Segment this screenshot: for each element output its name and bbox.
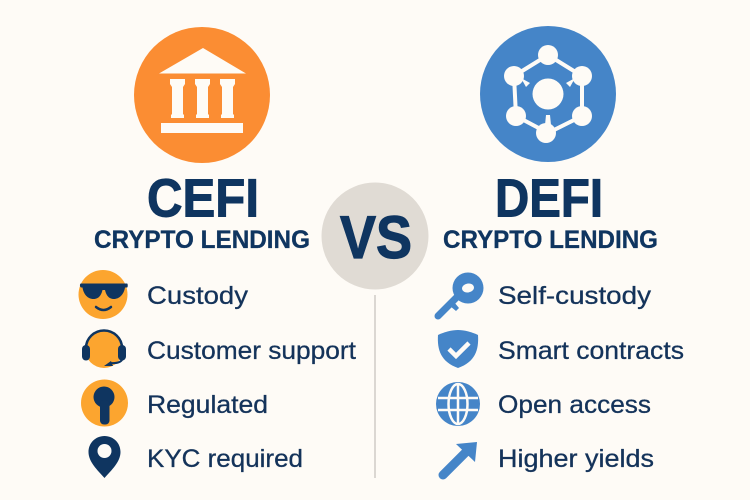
icon: location pin bbox=[88, 436, 120, 478]
label: regulated: Regulated bbox=[147, 391, 268, 419]
label: open access: Open access bbox=[498, 391, 651, 419]
subheading: DeFi crypto lending: CRYPTO LENDING bbox=[443, 226, 658, 254]
label: self-custody: Self-custody bbox=[498, 282, 652, 310]
subheading: CeFi crypto lending: CRYPTO LENDING bbox=[94, 226, 310, 254]
icon: CeFi bank bbox=[134, 27, 270, 163]
icon: sunglasses face bbox=[78, 270, 128, 319]
icon: DeFi network bbox=[480, 26, 616, 162]
label: custody: Custody bbox=[147, 282, 249, 310]
badge: VS bbox=[322, 182, 428, 290]
label: smart contracts: Smart contracts bbox=[498, 337, 684, 365]
icon: up-right arrow bbox=[443, 442, 477, 475]
heading: DeFi: DEFI bbox=[495, 168, 603, 228]
icon: customer support headset bbox=[82, 330, 126, 368]
badge: VS: VS bbox=[340, 204, 412, 271]
label: KYC required: KYC required bbox=[147, 445, 303, 473]
icon: keyhole bbox=[81, 380, 128, 426]
heading: CeFi: CEFI bbox=[147, 168, 259, 228]
icon: shield check bbox=[438, 330, 478, 368]
label: customer support: Customer support bbox=[147, 337, 356, 365]
icon: key bbox=[438, 272, 484, 316]
label: higher yields: Higher yields bbox=[498, 445, 654, 473]
icon: globe bbox=[436, 382, 480, 426]
